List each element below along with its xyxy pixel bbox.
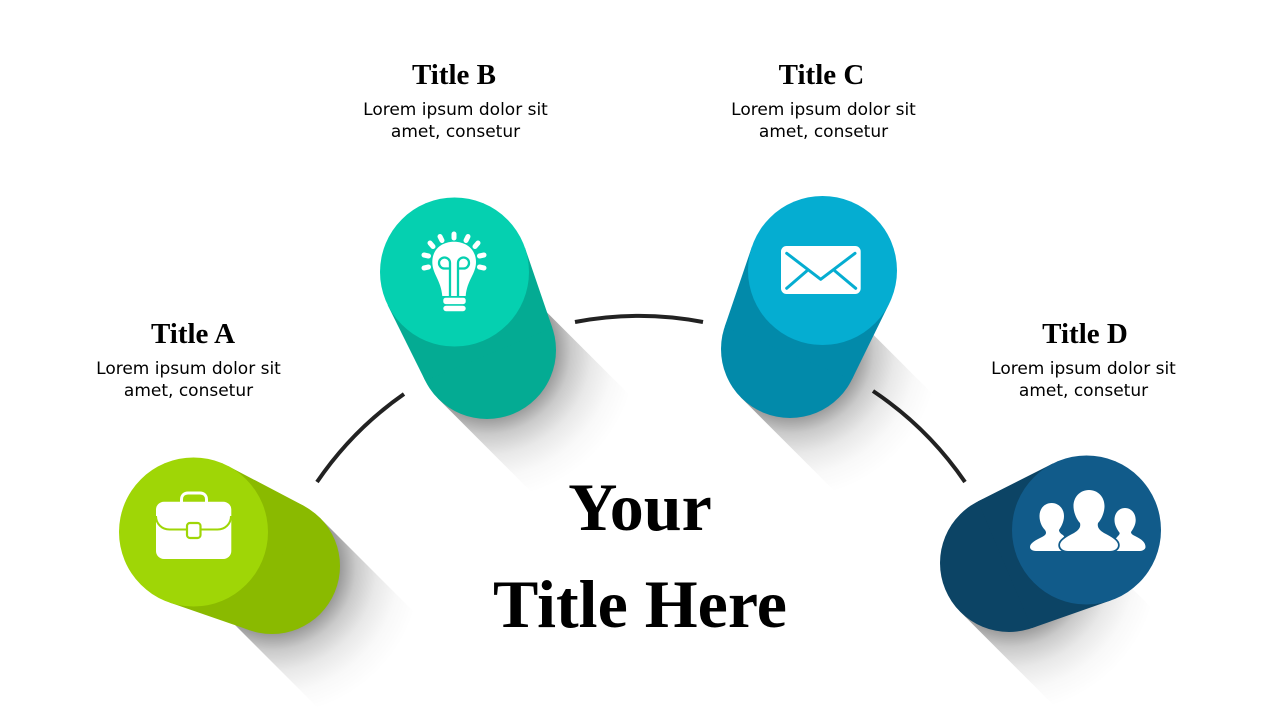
icon: briefcase [156,493,231,559]
text block: Title B: Lorem ipsum dolor sit [363,100,548,120]
text block: Title A: amet, consetur [124,381,253,401]
main title [493,469,787,642]
text block: Title A [96,318,281,401]
long shadow C [741,300,949,508]
icon: people [1030,490,1146,551]
text block: Title D: Title D [1042,318,1128,350]
cylinder body C [721,246,889,418]
text block: Title C: Title C [779,59,864,91]
cylinder face B [380,198,529,346]
cylinder body B [388,248,556,419]
text block: Title C [731,59,916,142]
long shadow D [960,514,1168,720]
text block: Title A: Title A [151,318,235,350]
cylinder face A [119,458,268,606]
main title: Title Here [493,566,787,642]
cylinder D: people [940,456,1168,720]
text block: Title B: Title B [412,59,496,91]
cylinder face C [748,196,897,345]
cylinder C: envelope [721,196,949,508]
text block: Title D: Lorem ipsum dolor sit [991,359,1176,379]
connector arc: B to C [575,316,703,322]
icon: envelope [781,246,861,294]
cylinder B: light bulb [380,198,646,509]
connector arc: A to B [317,394,404,482]
cylinder body A [169,466,340,634]
main title: Your [568,469,712,545]
text block: Title D: amet, consetur [1019,381,1148,401]
cylinder A: briefcase [119,458,430,720]
long shadow B [438,301,646,509]
text block: Title D [991,318,1176,401]
cylinder body D [940,464,1111,632]
connector arc: C to D [873,391,965,482]
text block: Title A: Lorem ipsum dolor sit [96,359,281,379]
text block: Title B [363,59,548,142]
icon: light bulb [424,234,484,311]
text block: Title B: amet, consetur [391,122,520,142]
cylinder face D [1012,456,1161,604]
text block: Title C: Lorem ipsum dolor sit [731,100,916,120]
long shadow A [224,518,430,720]
text block: Title C: amet, consetur [759,122,888,142]
